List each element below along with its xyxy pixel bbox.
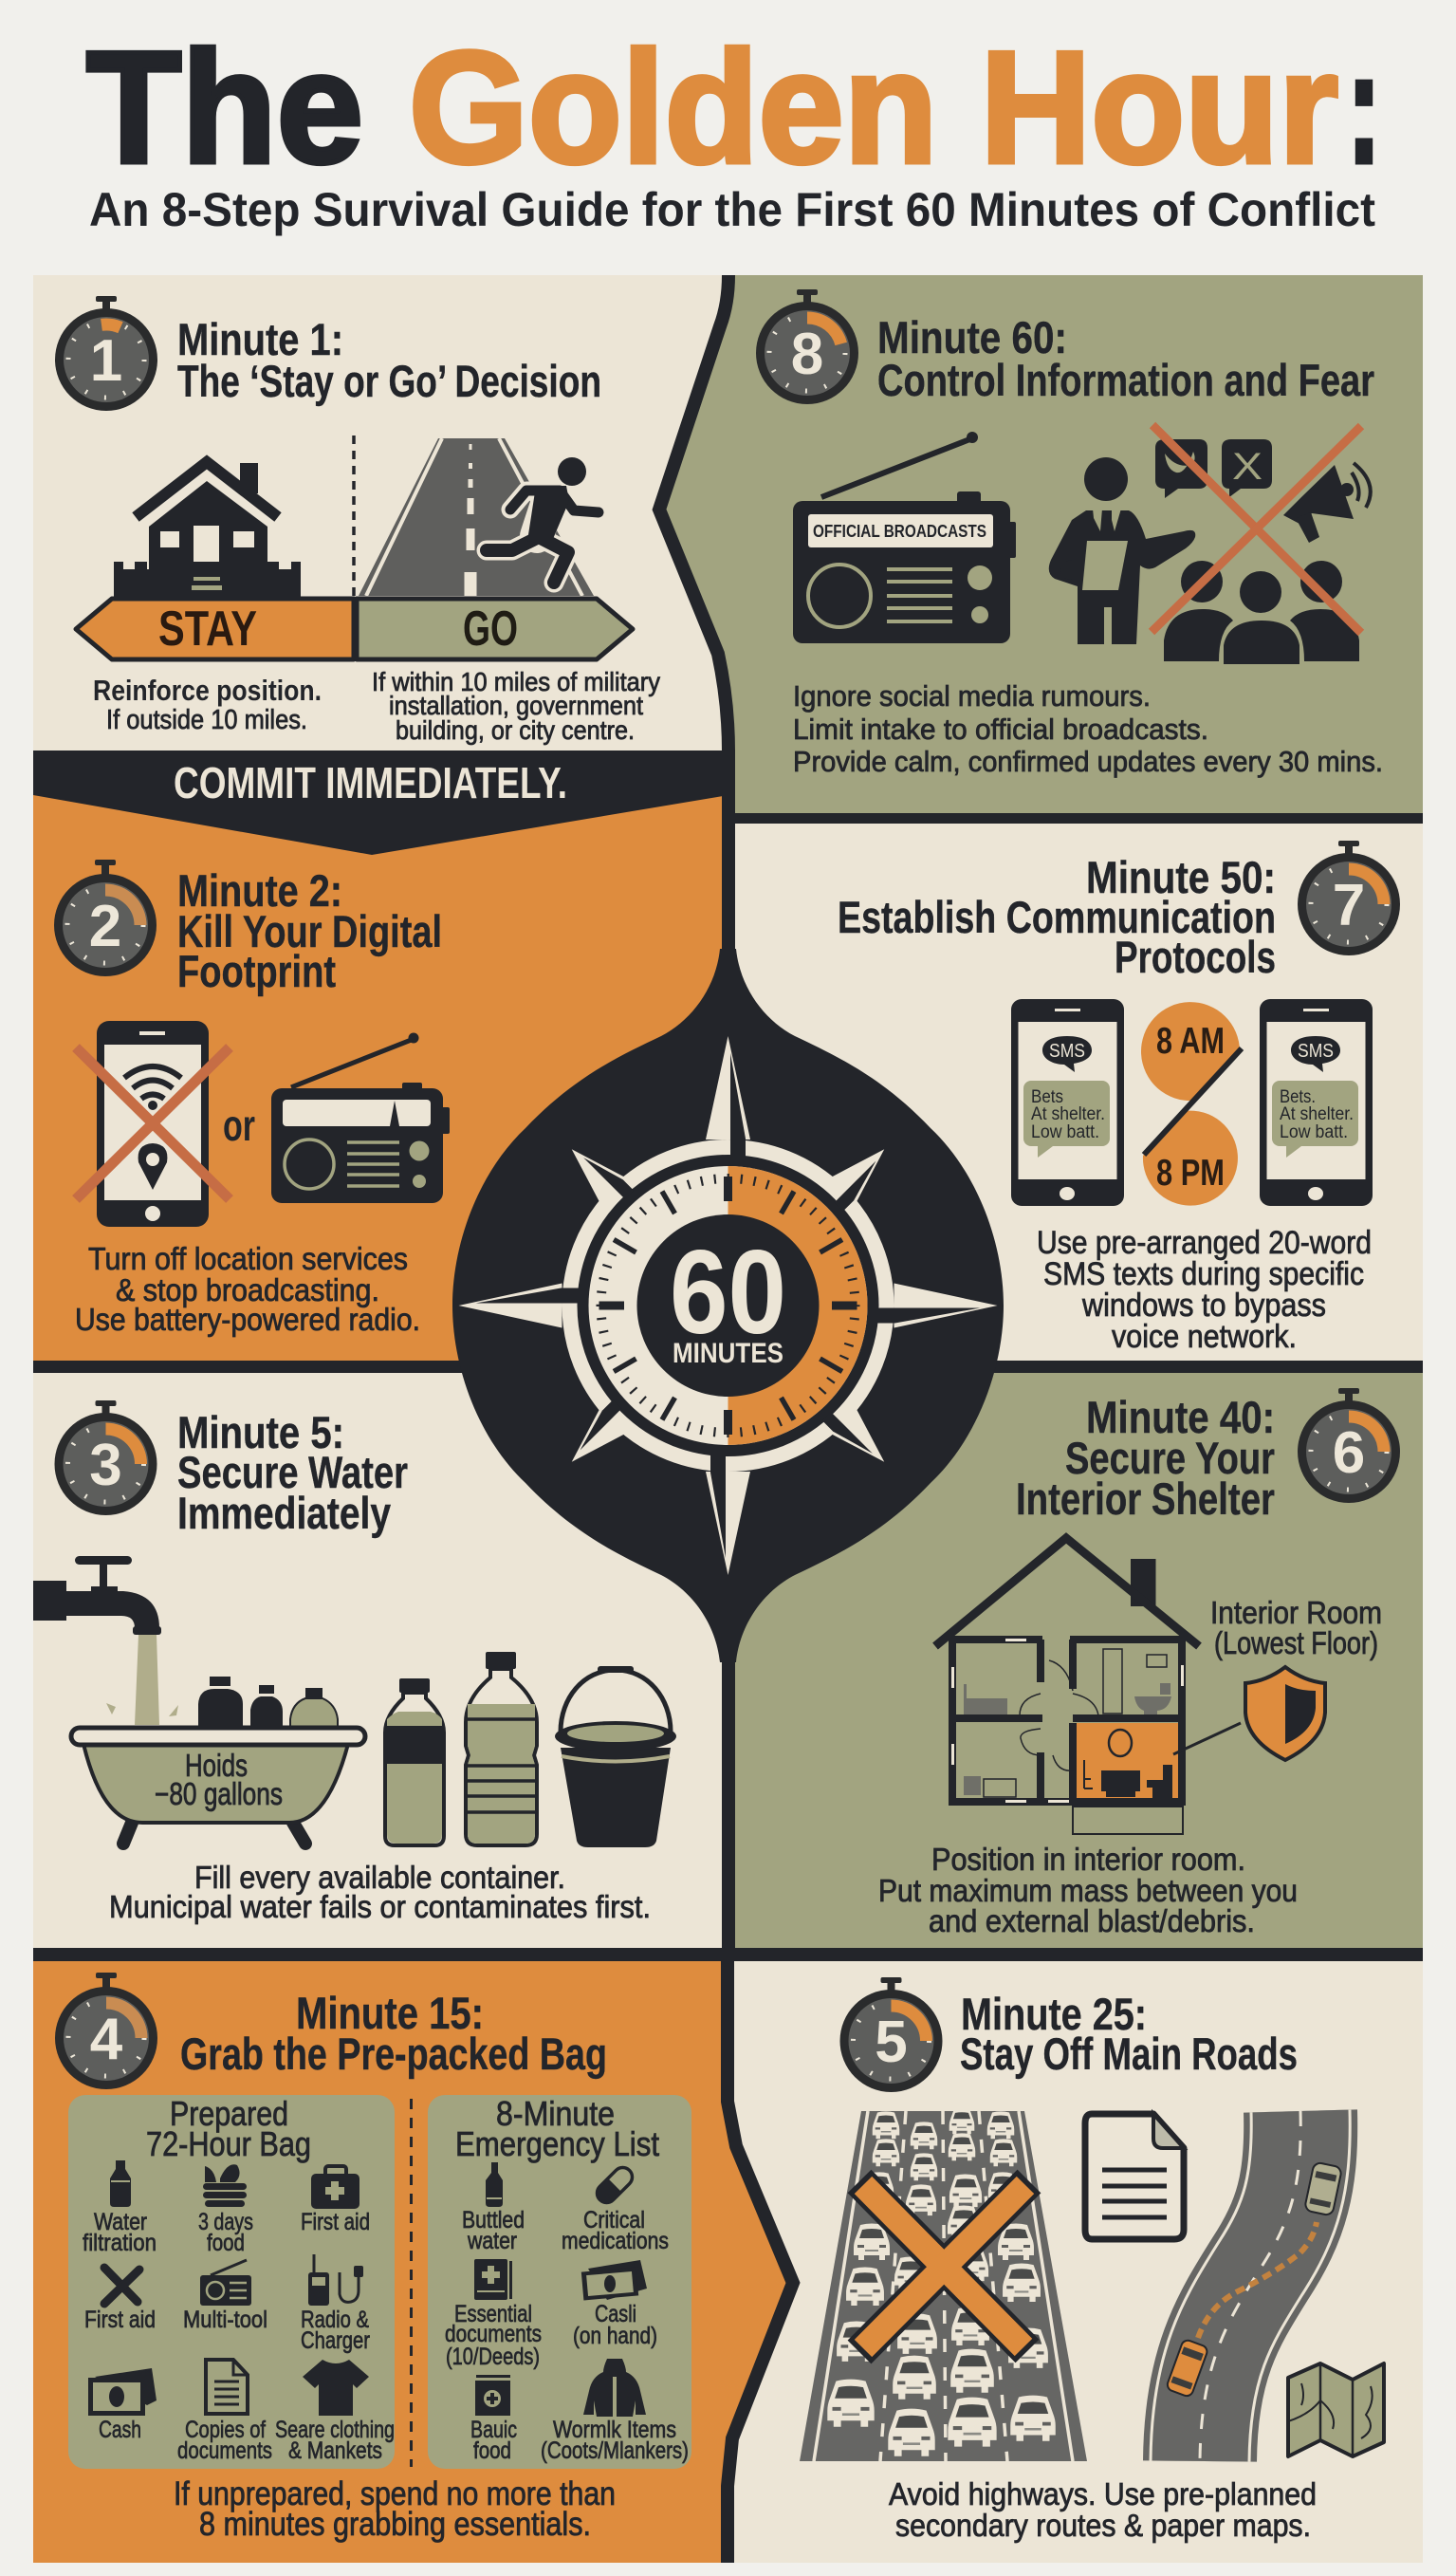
text: minute 5 (109, 1860, 651, 1924)
panel: minute 15 pre-packed bag (33, 1961, 793, 2563)
heading: prepared bag: Prepared (170, 2094, 288, 2133)
item: copies of documents: Copies of (185, 2417, 266, 2443)
heading: minute 15 (180, 1988, 607, 2079)
icon: bucket (555, 1666, 676, 1847)
icon: paper map (1288, 2363, 1384, 2456)
subtitle: An 8-Step Survival Guide for the First 60 Minutes of Conflict (89, 183, 1375, 236)
text: minute 5: Municipal water fails or contaminates first. (109, 1889, 651, 1924)
icon: bottle large (466, 1652, 537, 1845)
text: minute 50: Use pre-arranged 20-word (1037, 1225, 1372, 1261)
item: basic food: Bauic (470, 2417, 517, 2443)
heading: minute 2 (177, 865, 442, 996)
text: minute 50: windows to bypass (1081, 1288, 1326, 1324)
item: cash on hand (573, 2260, 657, 2349)
item: bottled water: Buttled (462, 2207, 525, 2233)
heading: minute 40: Minute 40: (1086, 1392, 1275, 1442)
icon: crossed phone (76, 1021, 230, 1227)
zigzag divider (659, 275, 728, 751)
text: minute 60: Ignore social media rumours. (793, 679, 1151, 713)
heading: emergency list: Emergency List (455, 2124, 659, 2163)
item: radio and charger: Radio & (301, 2307, 369, 2333)
text: minute 25: Avoid highways. Use pre-planned (889, 2476, 1317, 2511)
item: medications (562, 2163, 669, 2254)
banner: go: GO (463, 602, 518, 657)
dial (588, 1166, 867, 1445)
stopwatch 1: 1 (90, 328, 122, 394)
stopwatch 4 (55, 1973, 157, 2089)
icon: faucet (33, 1556, 178, 1725)
icon: document (1085, 2114, 1184, 2239)
icon: time windows (1141, 1002, 1242, 1206)
heading: minute 50: Establish Communication (838, 892, 1276, 942)
banner: stay: STAY (158, 602, 257, 657)
dashed separator (410, 2099, 413, 2467)
item: radio and charger: Charger (301, 2327, 370, 2354)
icon: shield (1245, 1667, 1325, 1760)
icon: radio official broadcasts (793, 432, 1016, 643)
title: : (1347, 18, 1381, 196)
icon: bottle small (385, 1678, 445, 1845)
item: multi-tool radio (183, 2260, 267, 2333)
text: minute 50: voice network. (1112, 1319, 1297, 1355)
heading: prepared bag: 72-Hour Bag (146, 2124, 311, 2163)
banner: go (357, 599, 633, 659)
banner: stay (76, 599, 354, 659)
icon: fortified house (114, 462, 301, 597)
label: interior room: Interior Room (1210, 1595, 1382, 1630)
text: minute 15: 8 minutes grabbing essentials. (199, 2506, 591, 2543)
icon: radio official broadcasts: OFFICIAL BROADCASTS (813, 522, 986, 541)
text: minute 60: Limit intake to official broadcasts. (793, 713, 1208, 746)
item: copies of documents (177, 2360, 272, 2464)
item: water filtration: Water (94, 2209, 147, 2235)
heading: minute 5: Immediately (177, 1488, 391, 1538)
icon: olive car (1304, 2161, 1342, 2216)
item: tools: First aid (84, 2307, 156, 2333)
text: minute 15: If unprepared, spend no more than (174, 2475, 616, 2512)
text: minute 50: SMS texts during specific (1043, 1256, 1364, 1292)
icon: time windows: 8 AM (1156, 1021, 1225, 1062)
heading: minute 2: Minute 2: (177, 865, 342, 916)
item: cash on hand: Casli (595, 2301, 636, 2327)
icon: phone sms left: SMS (1049, 1041, 1085, 1062)
stopwatch 8: 8 (791, 322, 823, 387)
icon: spokesperson (1049, 457, 1195, 644)
item: basic food: food (473, 2437, 511, 2464)
title: The (86, 18, 363, 196)
stopwatch 5: 5 (875, 2010, 908, 2075)
heading: minute 5: Minute 5: (177, 1407, 344, 1457)
panel: minute 1 stay or go (33, 275, 730, 751)
panel: minute 5 water (33, 1373, 728, 1949)
text: minute 40 (878, 1842, 1298, 1938)
text: minute 50 (1037, 1225, 1372, 1355)
commit band: COMMIT IMMEDIATELY. (174, 758, 567, 807)
heading: minute 60 (877, 312, 1374, 405)
text: minute 60 (793, 679, 1383, 778)
icon: phone sms left (1011, 999, 1124, 1206)
text: go (372, 667, 660, 745)
heading: minute 1: The ‘Stay or Go’ Decision (177, 356, 601, 406)
text: minute 15 (174, 2475, 616, 2543)
heading: minute 50: Minute 50: (1086, 852, 1276, 902)
panel: minute 2 digital footprint (33, 751, 728, 1362)
central compass (452, 949, 1004, 1662)
dial text: 60 minutes: 60 (670, 1227, 786, 1359)
heading: minute 5: Secure Water (177, 1447, 408, 1497)
icon: phone sms right: At shelter. (1280, 1104, 1354, 1124)
text: go: installation, government (389, 691, 643, 720)
item: basic food (470, 2375, 517, 2464)
item: warm items: Wormlk Items (553, 2417, 676, 2443)
heading: minute 50: Protocols (1115, 932, 1276, 982)
heading: minute 60: Minute 60: (877, 312, 1067, 362)
item: food: 3 days (198, 2209, 253, 2235)
heading: prepared bag (146, 2094, 311, 2163)
commit band (33, 751, 728, 855)
stopwatch 7 (1298, 841, 1400, 955)
item: first aid (301, 2166, 370, 2235)
dial text: 60 minutes: MINUTES (673, 1338, 783, 1369)
stopwatch 8 (756, 289, 858, 404)
stopwatch 1 (55, 296, 157, 411)
item: medications: medications (562, 2228, 669, 2254)
item: essential documents: documents (445, 2321, 542, 2347)
item: essential documents: Essential (454, 2301, 532, 2327)
icon: audience (1164, 561, 1359, 664)
heading: minute 1: Minute 1: (177, 314, 343, 364)
text: go: building, or city centre. (396, 715, 635, 745)
icon: phone sms right: SMS (1298, 1041, 1334, 1062)
heading: minute 25 (960, 1989, 1298, 2079)
item: copies of documents: documents (177, 2437, 272, 2464)
icon: social media bubbles (1155, 439, 1272, 498)
text: stay (93, 674, 322, 735)
icon: phone sms left: Low batt. (1031, 1122, 1099, 1142)
item: spare clothing (275, 2360, 395, 2464)
item: medications: Critical (583, 2207, 645, 2233)
icon: social media bubbles: X (1232, 446, 1262, 488)
text: minute 60: Provide calm, confirmed updates every 30 mins. (793, 745, 1383, 778)
text: minute 5: Fill every available container. (194, 1860, 565, 1895)
arrow divider (728, 1955, 793, 2563)
icon: orange cross (859, 2181, 1029, 2352)
item: tools (84, 2268, 156, 2333)
icon: phone sms right (1260, 999, 1373, 1206)
item: cash: Cash (99, 2417, 141, 2443)
text: minute 2: Use battery-powered radio. (75, 1302, 420, 1337)
item: first aid: First aid (301, 2209, 370, 2235)
icon: phone sms left: At shelter. (1031, 1104, 1105, 1124)
panel: 8-minute emergency list (428, 2094, 691, 2469)
item: radio and charger (301, 2254, 370, 2354)
panel: minute 40 interior shelter (728, 1373, 1423, 1949)
text: minute 25: secondary routes & paper maps. (895, 2508, 1311, 2543)
text: minute 2 (75, 1241, 420, 1337)
heading: minute 25: Stay Off Main Roads (960, 2029, 1298, 2079)
panel: minute 60 control information (659, 275, 1423, 813)
compass points: diagonal (559, 1136, 897, 1475)
heading: minute 15: Grab the Pre-packed Bag (180, 2029, 607, 2079)
item: cash (88, 2368, 157, 2443)
icon: time windows: 8 PM (1156, 1153, 1225, 1194)
icon: secondary winding road (1198, 2111, 1317, 2461)
stopwatch 4: 4 (90, 2007, 123, 2072)
icon: phone sms right: Bets. (1280, 1087, 1316, 1107)
item: multi-tool radio: Multi-tool (183, 2307, 267, 2333)
text: go: If within 10 miles of military (372, 667, 660, 696)
icon: bathtub: −80 gallons (155, 1776, 283, 1811)
stopwatch 2 (54, 860, 157, 976)
icon: road with runner (359, 438, 599, 596)
icon: phone sms left: Bets (1031, 1087, 1063, 1107)
panel: minute 50 communication (728, 813, 1423, 1362)
text: minute 2: & stop broadcasting. (116, 1272, 379, 1307)
text: or: or (223, 1101, 255, 1150)
divider (352, 436, 356, 597)
icon: orange car (1166, 2339, 1208, 2398)
item: spare clothing: Seare clothing (275, 2417, 395, 2443)
label: interior room: (Lowest Floor) (1214, 1625, 1378, 1660)
icon: bathtub (71, 1728, 365, 1844)
compass points: cardinal (459, 1036, 998, 1575)
item: cash on hand: (on hand) (573, 2323, 657, 2349)
stopwatch 3 (55, 1400, 157, 1515)
item: essential documents (445, 2259, 542, 2370)
title: Golden Hour (409, 18, 1338, 196)
item: warm items (541, 2359, 689, 2464)
item: water filtration: filtration (83, 2230, 157, 2256)
item: warm items: (Coots/Mlankers) (541, 2437, 689, 2464)
text: stay: If outside 10 miles. (106, 705, 307, 735)
heading: minute 50 (838, 852, 1276, 982)
icon: phone sms right: Low batt. (1280, 1122, 1348, 1142)
stopwatch 6: 6 (1333, 1420, 1365, 1486)
text: minute 40: Put maximum mass between you (878, 1873, 1298, 1908)
item: food (198, 2164, 253, 2256)
text: minute 40: Position in interior room. (931, 1842, 1245, 1877)
icon: red cross (1152, 425, 1361, 633)
text: minute 25 (889, 2476, 1317, 2543)
heading: minute 2: Footprint (177, 946, 336, 996)
heading: emergency list: 8-Minute (496, 2094, 615, 2133)
heading: emergency list (455, 2094, 659, 2163)
heading: minute 15: Minute 15: (296, 1988, 484, 2038)
text: minute 40: and external blast/debris. (929, 1903, 1255, 1938)
panel: minute 25 main roads (728, 1961, 1423, 2563)
stopwatch 2: 2 (89, 894, 121, 959)
stopwatch 5 (840, 1977, 943, 2092)
label: interior room (1210, 1595, 1382, 1660)
panel: prepared 72-hour bag (68, 2094, 395, 2469)
item: bottled water: water (467, 2228, 517, 2254)
dividers (33, 750, 1423, 1961)
heading: minute 40 (1016, 1392, 1275, 1524)
item: bottled water (462, 2162, 525, 2254)
text: stay: Reinforce position. (93, 674, 322, 707)
heading: minute 1 (177, 314, 601, 406)
stopwatch 7: 7 (1333, 873, 1365, 938)
icon: battery radio (271, 1032, 450, 1203)
icon: jammed highway (800, 2108, 1087, 2461)
heading: minute 5 (177, 1407, 408, 1538)
item: spare clothing: & Mankets (288, 2437, 382, 2464)
stopwatch 6 (1298, 1388, 1400, 1503)
heading: minute 2: Kill Your Digital (177, 906, 442, 956)
stopwatch 3: 3 (89, 1433, 122, 1498)
heading: minute 40: Interior Shelter (1016, 1473, 1275, 1524)
heading: minute 25: Minute 25: (961, 1989, 1147, 2039)
item: essential documents: (10/Deeds) (446, 2344, 540, 2370)
icon: megaphone (1283, 463, 1371, 543)
icon: bathtub: Hoids (185, 1748, 248, 1783)
item: food: food (207, 2230, 245, 2256)
icon: house floor plan (935, 1538, 1241, 1834)
icon: bottles on tub (198, 1677, 338, 1727)
heading: minute 40: Secure Your (1065, 1433, 1275, 1483)
text: minute 2: Turn off location services (88, 1241, 408, 1276)
item: water filtration (83, 2160, 157, 2256)
